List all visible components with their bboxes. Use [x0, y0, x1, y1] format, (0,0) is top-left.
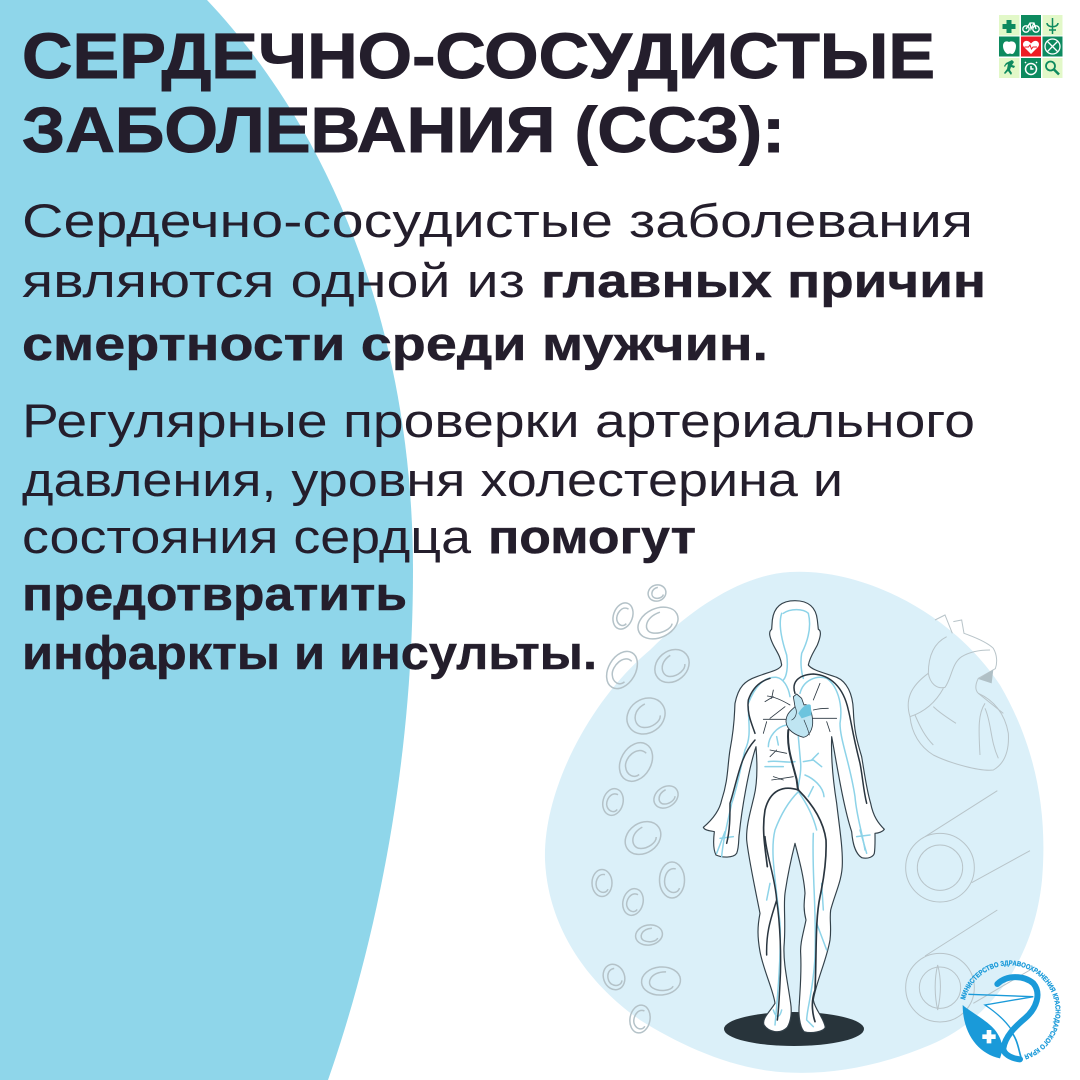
ministry emblem: МИНИСТЕРСТВО ЗДРАВООХРАНЕНИЯ КРАСНОДАРСКОГО КРАЯ: [960, 960, 1061, 1060]
title: [22, 20, 935, 166]
text block: first paragraph: [22, 194, 986, 370]
dark vessels: [727, 674, 867, 1022]
ground shadow: [724, 1012, 864, 1046]
light blue blob behind the illustration: [545, 572, 1043, 1073]
artery cross-section: open vessel: [906, 791, 1030, 902]
human body with circulatory system: [703, 601, 884, 1033]
body silhouette: [703, 601, 884, 1033]
icon: health grid logo: [999, 15, 1062, 78]
text block: second paragraph: [22, 394, 975, 679]
text block: first paragraph: смертности среди мужчин.: [22, 317, 768, 370]
blue vessels: [717, 610, 870, 1027]
text block: second paragraph: состояния сердца: [22, 510, 472, 563]
large blue background shape: [0, 0, 413, 1080]
title: ЗАБОЛЕВАНИЯ (ССЗ):: [22, 94, 785, 166]
artery cross-section: narrowed vessel: [906, 910, 1030, 1022]
text block: first paragraph: являются одной из: [22, 254, 525, 307]
heart: [786, 694, 813, 737]
text block: first paragraph: Сердечно-сосудистые заболевания: [22, 194, 973, 247]
anatomical heart outline: [908, 615, 1008, 770]
text block: second paragraph: Регулярные проверки артериального: [22, 394, 975, 447]
crescent with cross: [963, 1005, 1002, 1058]
text block: second paragraph: давления, уровня холестерина и: [22, 453, 843, 506]
text block: second paragraph: инфаркты и инсульты.: [22, 626, 597, 679]
title: СЕРДЕЧНО-СОСУДИСТЫЕ: [22, 20, 935, 92]
red blood cells: [592, 582, 696, 1035]
text block: second paragraph: предотвратить: [22, 567, 407, 620]
serpent and bowl: [997, 977, 1037, 1059]
text block: second paragraph: помогут: [488, 510, 696, 563]
text block: first paragraph: главных причин: [541, 254, 986, 307]
